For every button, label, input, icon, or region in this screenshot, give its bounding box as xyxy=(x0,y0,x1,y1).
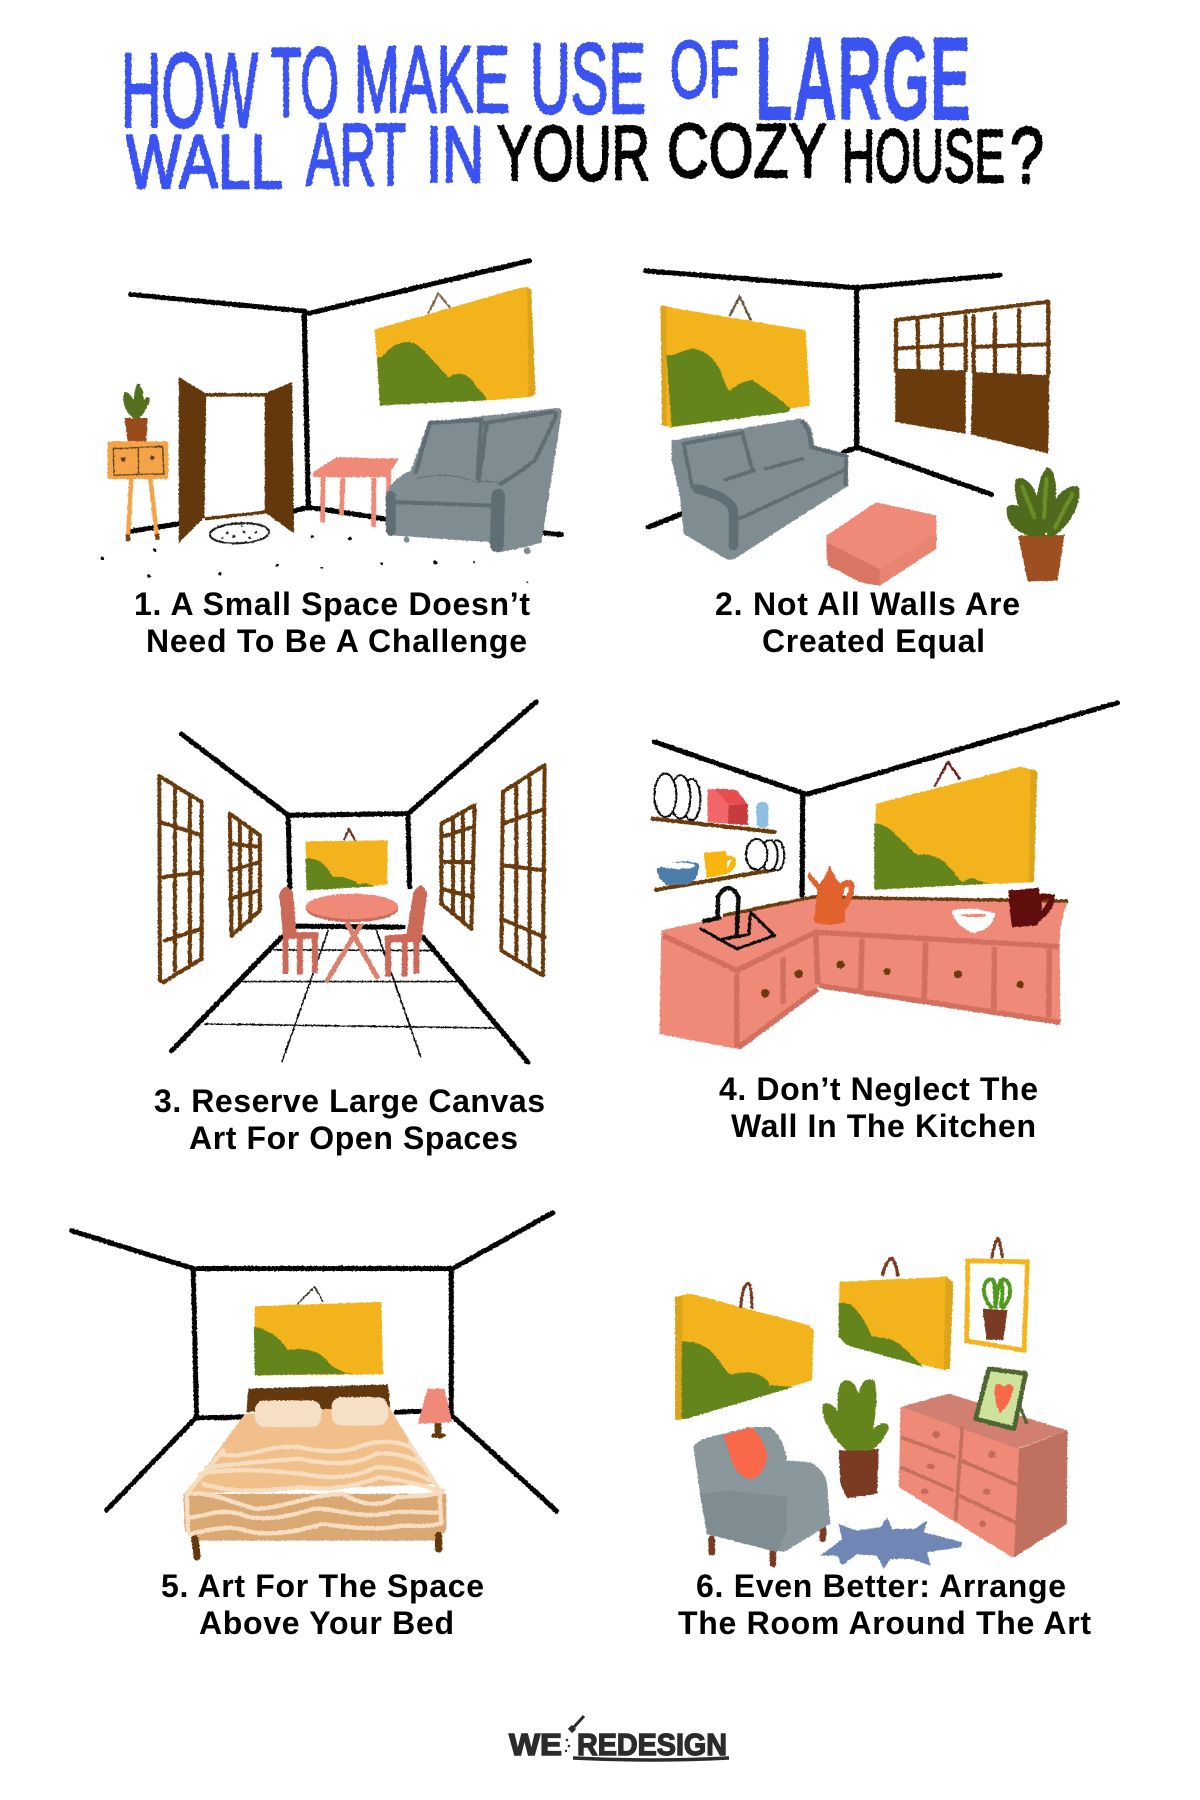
illustration 5 xyxy=(72,1213,557,1557)
armchair xyxy=(693,1427,830,1564)
caption 4 xyxy=(719,1071,1038,1144)
room lines xyxy=(72,1213,557,1511)
title: IN xyxy=(426,110,484,199)
dark mug xyxy=(1008,888,1055,927)
caption 3 xyxy=(154,1083,545,1156)
room lines xyxy=(131,261,562,535)
doormat xyxy=(209,522,270,545)
caption 5: 5. Art For The Space xyxy=(161,1568,484,1604)
illustration 4 xyxy=(653,703,1117,1049)
caption 5 xyxy=(161,1568,484,1641)
pink table xyxy=(313,457,399,527)
shelves xyxy=(653,819,775,890)
title: YOUR xyxy=(497,109,650,197)
white bowl xyxy=(953,909,995,933)
middle painting xyxy=(839,1258,953,1370)
illustration 6 xyxy=(675,1238,1067,1569)
title xyxy=(121,12,1044,205)
large left painting xyxy=(675,1283,814,1420)
logo: REDESIGN xyxy=(577,1727,727,1762)
caption 6: 6. Even Better: Arrange xyxy=(696,1568,1066,1604)
chairs xyxy=(279,885,427,977)
panel 6: arrange the room xyxy=(675,1238,1091,1641)
caption 4: Wall In The Kitchen xyxy=(731,1108,1036,1144)
caption 1: Need To Be A Challenge xyxy=(146,623,527,659)
wall art xyxy=(874,762,1037,890)
caption 1: 1. A Small Space Doesn’t xyxy=(134,586,530,622)
caption 5: Above Your Bed xyxy=(199,1605,454,1641)
room lines xyxy=(172,702,536,1062)
caption 2: 2. Not All Walls Are xyxy=(715,586,1020,622)
sofa xyxy=(672,419,849,560)
panel 1: small space xyxy=(101,261,562,659)
title: ? xyxy=(1010,111,1044,200)
illustration 2 xyxy=(646,271,1076,586)
title: LARGE xyxy=(755,12,971,146)
wall art xyxy=(254,1287,383,1375)
panel 5: bed xyxy=(72,1213,557,1641)
title: ART xyxy=(306,105,406,204)
caption 1 xyxy=(134,586,530,659)
title: HOW xyxy=(121,32,258,150)
sink xyxy=(701,888,775,949)
headboard xyxy=(246,1384,390,1412)
teapot xyxy=(807,865,854,925)
title: WALL xyxy=(126,120,283,205)
panel 2: walls xyxy=(646,271,1076,659)
title: OF xyxy=(670,25,739,115)
heart picture frame xyxy=(976,1369,1027,1429)
side table with plant xyxy=(107,385,168,541)
title: TO xyxy=(271,27,339,138)
potted plant xyxy=(824,1381,887,1498)
armchair xyxy=(386,408,562,554)
wall art xyxy=(661,297,810,428)
blue rug xyxy=(820,1517,962,1569)
room lines xyxy=(654,703,1117,895)
caption 4: 4. Don’t Neglect The xyxy=(719,1071,1038,1107)
bed xyxy=(183,1397,446,1557)
room lines xyxy=(646,271,1000,527)
potted plant xyxy=(1010,470,1076,581)
dishes on shelves xyxy=(654,774,784,885)
logo xyxy=(509,1716,729,1762)
lamp xyxy=(418,1389,452,1438)
caption 2: Created Equal xyxy=(762,623,985,659)
logo: WE xyxy=(509,1727,562,1762)
wall art xyxy=(375,287,535,405)
floor tiles xyxy=(205,930,498,1061)
title: HOUSE xyxy=(842,114,1005,198)
dining table xyxy=(306,894,398,982)
caption 6: The Room Around The Art xyxy=(678,1605,1091,1641)
windows xyxy=(159,765,545,982)
framed cactus picture xyxy=(967,1238,1027,1350)
counter xyxy=(660,897,1068,1049)
wall art xyxy=(305,829,387,890)
panel 3: open spaces xyxy=(154,702,545,1156)
caption 2 xyxy=(715,586,1020,659)
ottoman xyxy=(826,502,936,586)
panel 4: kitchen xyxy=(653,703,1117,1144)
illustration 1 xyxy=(101,261,562,583)
caption 3: Art For Open Spaces xyxy=(189,1120,518,1156)
title: COZY xyxy=(667,109,827,194)
title: USE xyxy=(530,23,646,135)
dresser xyxy=(899,1394,1067,1557)
illustration 3 xyxy=(159,702,545,1062)
floor dots xyxy=(101,535,528,583)
caption 6 xyxy=(678,1568,1091,1641)
door xyxy=(179,377,294,543)
caption 3: 3. Reserve Large Canvas xyxy=(154,1083,545,1119)
title: MAKE xyxy=(354,27,510,133)
window xyxy=(895,302,1049,454)
